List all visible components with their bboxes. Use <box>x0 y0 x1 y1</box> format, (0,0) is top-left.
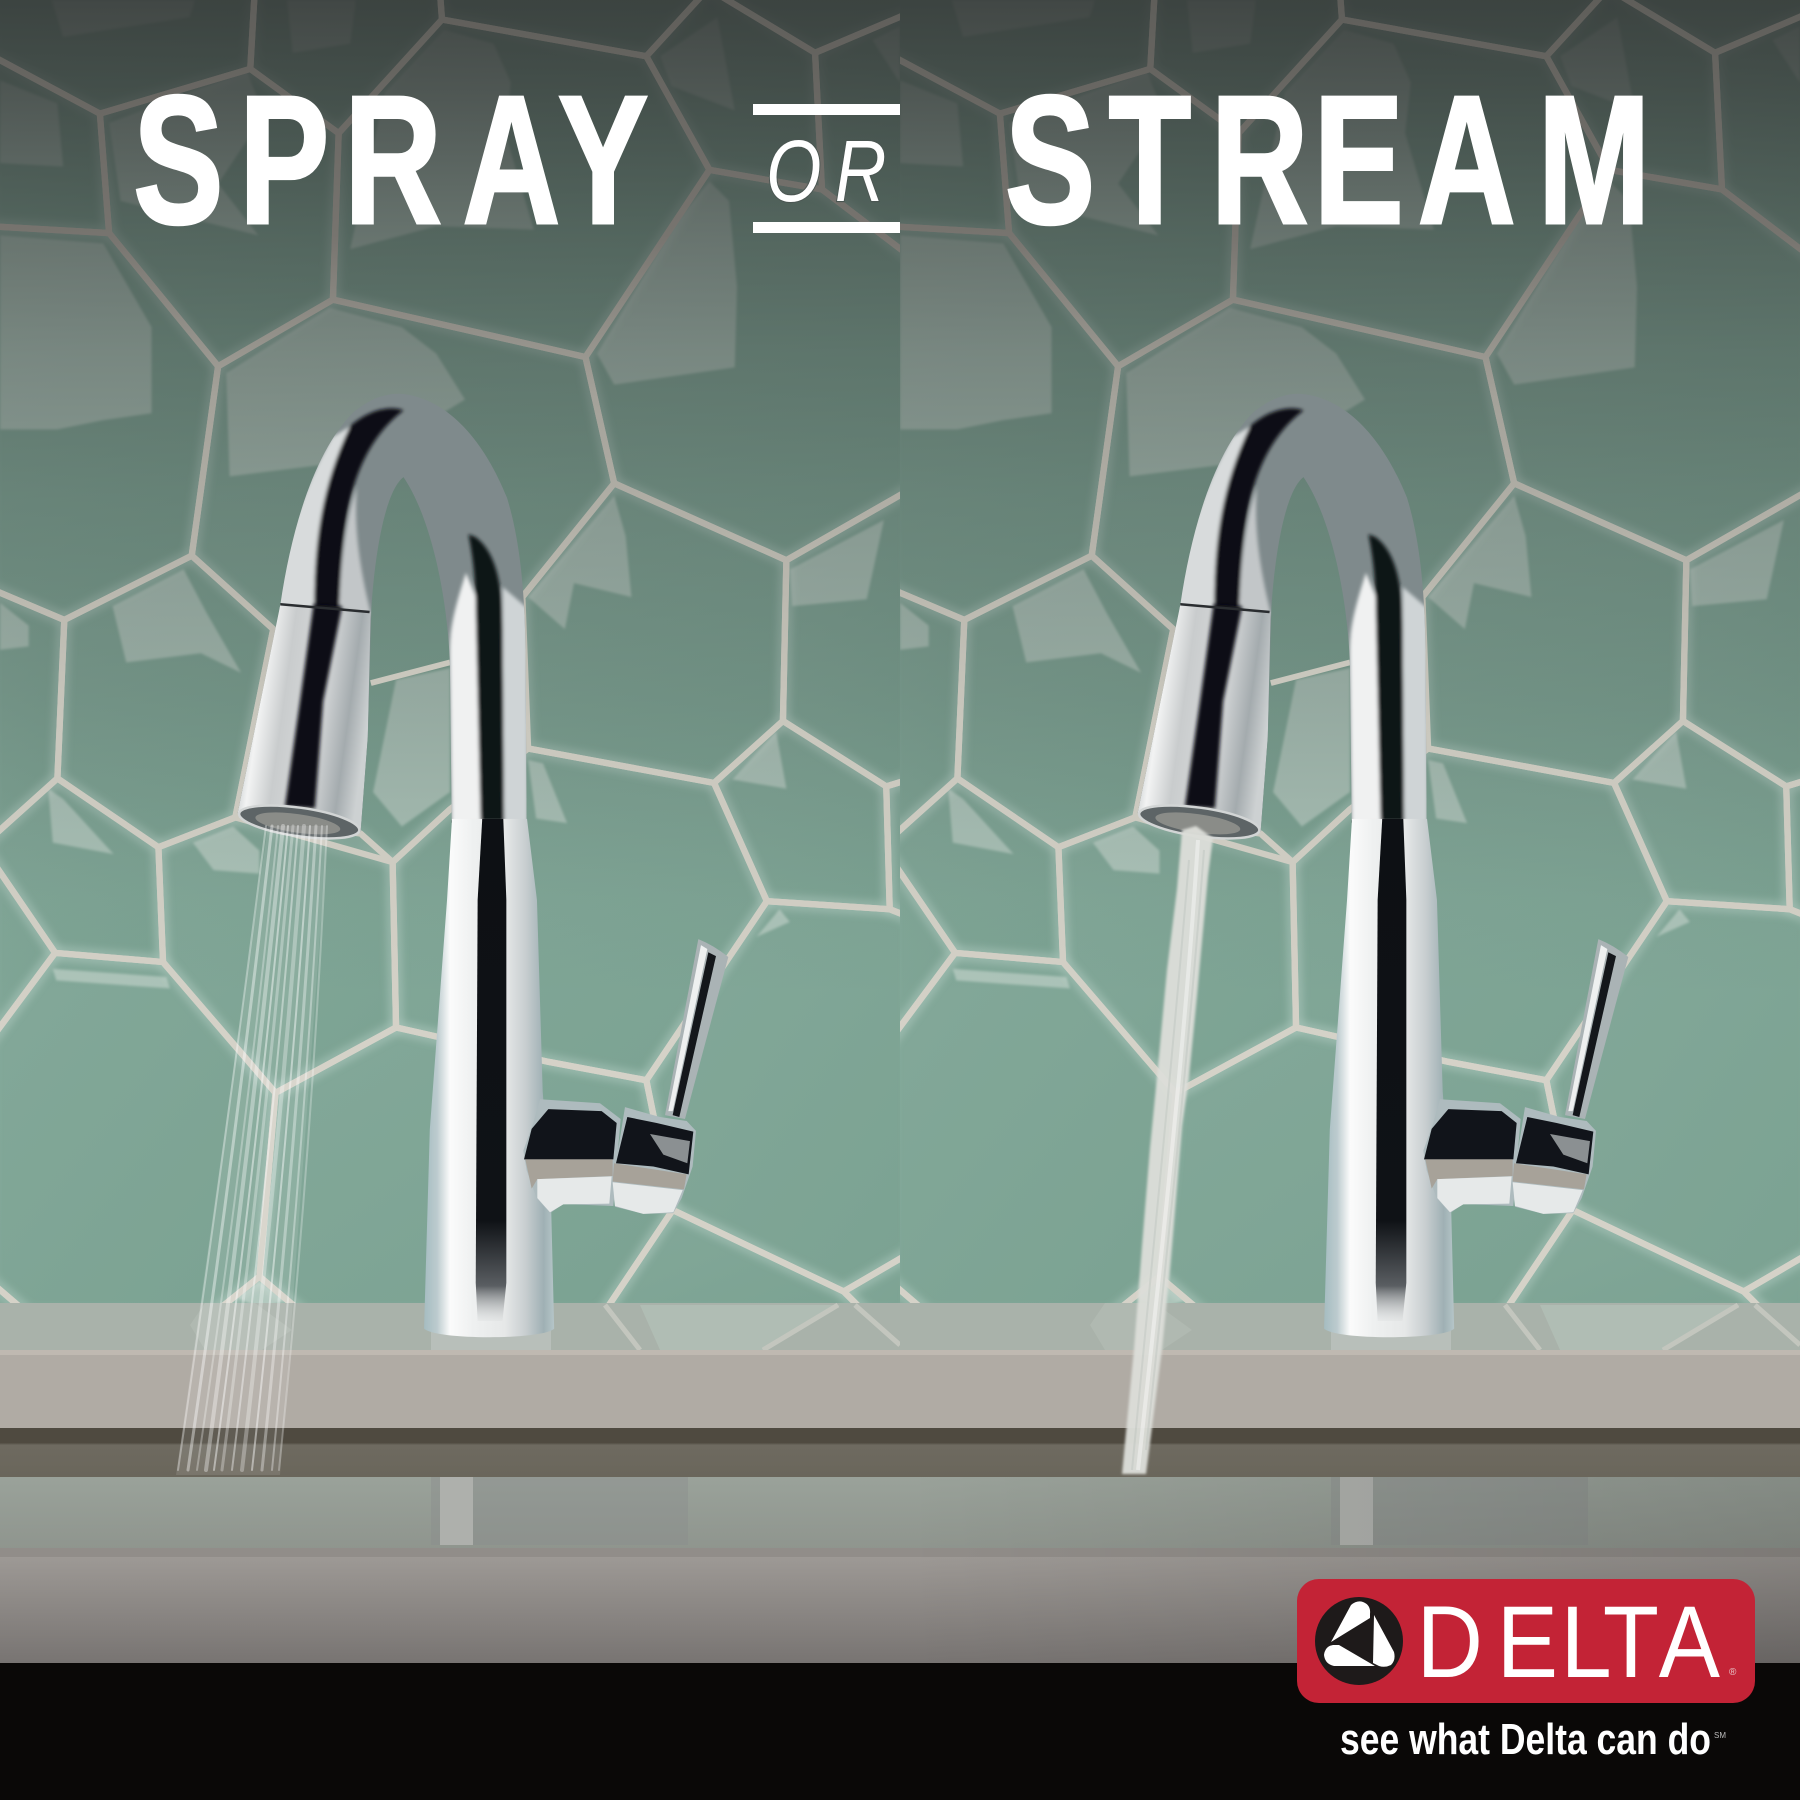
panel: spray <box>0 0 900 1663</box>
heading: spray: SPRAY <box>133 58 648 263</box>
icon: Delta mark <box>1315 1597 1403 1685</box>
registered mark: ® <box>1729 1667 1737 1678</box>
water: stream <box>1122 826 1213 1474</box>
heading: stream: STREAM <box>1005 58 1651 263</box>
counter <box>900 1303 1800 1663</box>
backsplash tiles <box>889 0 1800 1320</box>
lower-right vignette <box>900 1477 1800 1663</box>
tagline: SM <box>1714 1731 1726 1740</box>
faucet <box>236 380 728 1337</box>
backsplash tiles <box>0 0 918 1320</box>
logo: Delta <box>1297 1579 1755 1703</box>
faucet <box>1136 380 1628 1337</box>
counter <box>0 1303 900 1663</box>
wordmark: DELTA <box>1417 1584 1720 1699</box>
heading: or <box>753 104 900 233</box>
tagline: see what Delta can do <box>1340 1715 1711 1764</box>
panel: stream <box>900 0 1800 1663</box>
heading: or: OR <box>766 122 886 220</box>
water: spray <box>176 826 328 1475</box>
